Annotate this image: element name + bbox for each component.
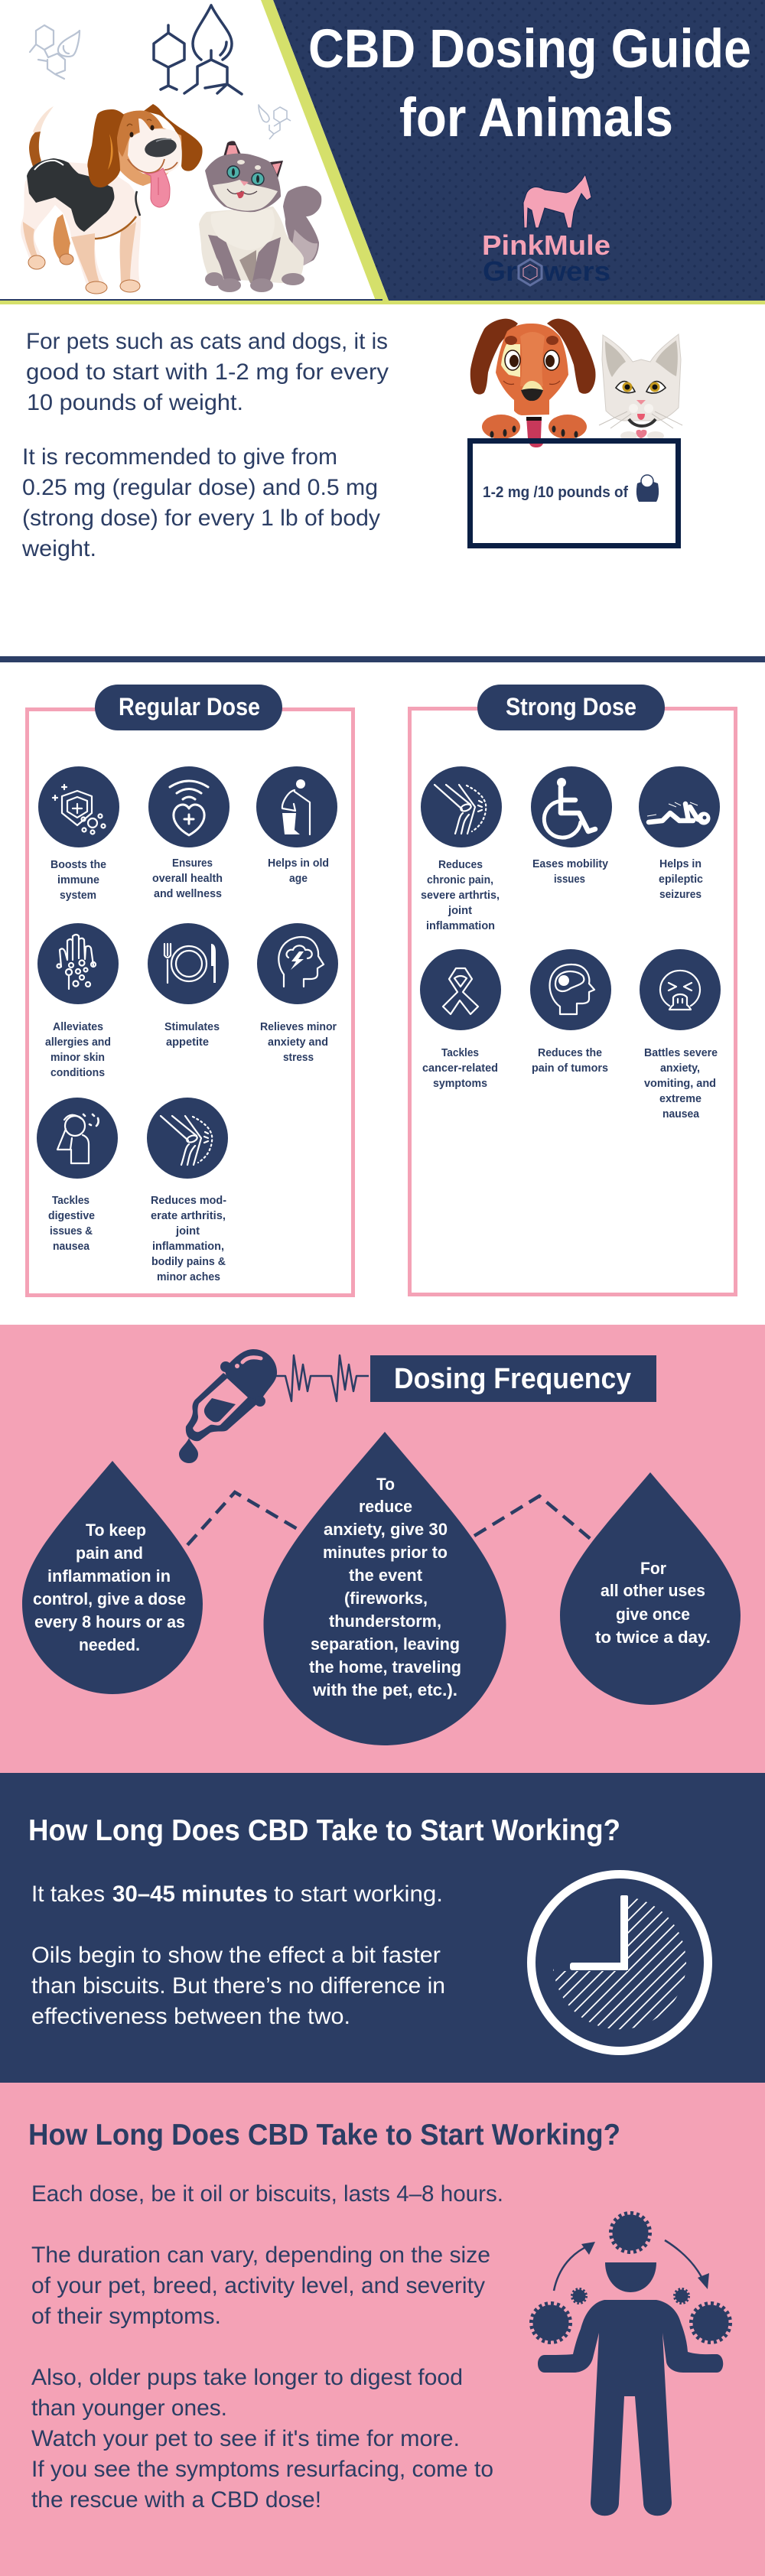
heading: dosing frequency: Dosing Frequency	[394, 1363, 631, 1395]
item: boosts immune system	[38, 766, 119, 902]
item: allergies	[37, 923, 119, 1079]
item: digestive issues: issues &	[50, 1225, 93, 1238]
drop: all other uses: For	[640, 1559, 666, 1578]
icon: clock	[527, 1870, 712, 2055]
item: anxiety: Relieves minor	[260, 1020, 337, 1033]
item: moderate arthritis	[147, 1098, 228, 1283]
heading: regular dose	[95, 685, 282, 730]
item: mobility: issues	[554, 873, 585, 886]
panel: strong dose	[410, 685, 736, 1294]
item: cancer symptoms: cancer-related	[422, 1062, 498, 1075]
icon: dropper with pulse	[179, 1349, 369, 1463]
item: epileptic seizures: epileptic	[659, 873, 703, 886]
title: for Animals	[399, 88, 673, 148]
item: anxiety	[257, 923, 338, 1064]
heading: dosing frequency	[370, 1355, 656, 1402]
item: severe nausea: extreme	[659, 1092, 702, 1105]
item: boosts immune system: immune	[57, 873, 99, 886]
logo: Pink Mule Growers: wers	[542, 255, 610, 287]
drop: anxiety: thunderstorm,	[329, 1612, 441, 1631]
text: duration factors: of their symptoms.	[31, 2304, 221, 2329]
drop: anxiety: minutes prior to	[323, 1543, 448, 1562]
item: appetite: appetite	[166, 1036, 209, 1049]
heading: strong dose: Strong Dose	[506, 693, 636, 720]
drop: anxiety: (fireworks,	[344, 1589, 428, 1608]
text: duration factors	[31, 2243, 490, 2329]
drop: anxiety: To	[376, 1475, 395, 1494]
illustration: fluffy cat	[199, 141, 321, 292]
item: allergies: allergies and	[45, 1036, 111, 1049]
item: epileptic seizures: seizures	[659, 888, 702, 901]
text: oils versus biscuits: effectiveness between the two.	[31, 2004, 350, 2029]
drop: all other uses: to twice a day.	[595, 1628, 711, 1647]
panel: duration of effect	[0, 2083, 765, 2576]
drop: all other uses: all other uses	[601, 1581, 705, 1600]
drop: pain and inflammation: pain and	[76, 1543, 143, 1563]
drop: pain and inflammation: every 8 hours or as	[34, 1612, 185, 1631]
item: boosts immune system: system	[60, 889, 96, 902]
item: chronic pain	[421, 766, 502, 932]
drop: pain and inflammation: needed.	[79, 1635, 140, 1654]
text: duration factors: of your pet, breed, activity level, and severity	[31, 2273, 485, 2298]
logo: Pink Mule Growers: Gr	[483, 255, 517, 287]
drop: pain and inflammation	[22, 1461, 203, 1694]
item: allergies: minor skin	[50, 1051, 105, 1064]
icon: molecule with drop	[154, 5, 242, 94]
item: digestive issues: Tackles	[52, 1194, 90, 1207]
illustration: beagle dog	[21, 104, 203, 294]
intro text: regular and strong dose	[21, 444, 380, 561]
item: severe nausea: anxiety,	[660, 1062, 700, 1075]
item: mobility: Eases mobility	[532, 857, 609, 870]
item: tumor pain	[530, 949, 611, 1075]
item: severe nausea: Battles severe	[644, 1046, 718, 1059]
item: chronic pain: Reduces	[438, 858, 483, 871]
item: cancer symptoms: Tackles	[441, 1046, 479, 1059]
item: old age: age	[289, 872, 308, 885]
drop: anxiety: with the pet, etc.).	[312, 1680, 457, 1699]
item: tumor pain: pain of tumors	[532, 1062, 608, 1075]
panel: dosing frequency	[0, 1325, 765, 1773]
item: overall health	[148, 766, 230, 900]
text: duration factors: The duration can vary, depending on the size	[31, 2243, 490, 2268]
text: duration: Each dose, be it oil or biscuits, lasts 4–8 hours.	[31, 2181, 503, 2207]
text: older pups: the rescue with a CBD dose!	[31, 2487, 321, 2513]
gears	[531, 2213, 730, 2342]
item: overall health: and wellness	[154, 887, 222, 900]
sign	[470, 441, 678, 546]
item: anxiety: stress	[283, 1051, 314, 1064]
text: older pups: Also, older pups take longer to digest food	[31, 2365, 463, 2390]
text: oils versus biscuits: Oils begin to show the effect a bit faster	[31, 1943, 441, 1968]
item: severe nausea	[640, 949, 721, 1120]
drop: all other uses: give once	[616, 1605, 690, 1624]
item: cancer symptoms: symptoms	[433, 1077, 487, 1090]
drop: anxiety: reduce	[359, 1497, 412, 1516]
item: old age: Helps in old	[268, 857, 329, 870]
text: older pups: than younger ones.	[31, 2395, 227, 2421]
heading: How Long Does CBD Take to Start Working?	[28, 2119, 620, 2152]
item: old age	[256, 766, 337, 885]
item: severe nausea: vomiting, and	[644, 1077, 716, 1090]
intro text: regular and strong dose: weight.	[21, 536, 96, 561]
intro text: regular and strong dose: (strong dose) for every 1 lb of body	[22, 506, 380, 531]
heading: regular dose: Regular Dose	[119, 693, 260, 720]
icon: faint molecule left	[30, 25, 80, 79]
item: overall health: overall health	[152, 872, 223, 885]
item: severe nausea: nausea	[662, 1107, 700, 1120]
drop: pain and inflammation: control, give a dose	[33, 1589, 186, 1608]
drop: all other uses	[560, 1472, 741, 1705]
text: onset time	[31, 1882, 443, 1907]
item: chronic pain: inflammation	[426, 919, 495, 932]
intro text: regular and strong dose: 0.25 mg (regular dose) and 0.5 mg	[22, 475, 378, 500]
panel: regular dose	[28, 685, 353, 1296]
text: oils versus biscuits: than biscuits. But there’s no difference in	[31, 1973, 445, 1999]
item: moderate arthritis: inflammation,	[152, 1240, 224, 1253]
drop: pain and inflammation: To keep	[86, 1521, 146, 1540]
text: older pups: Watch your pet to see if it's time for more.	[31, 2426, 460, 2451]
header banner	[0, 0, 765, 304]
drop: anxiety: the event	[349, 1566, 423, 1585]
panel: time to start working	[0, 1773, 765, 2083]
cartoon cat	[599, 334, 682, 441]
item: digestive issues: digestive	[48, 1209, 95, 1222]
logo: Pink Mule Growers	[482, 174, 610, 287]
item: mobility	[531, 766, 612, 886]
drop: anxiety: the home, traveling	[309, 1657, 461, 1677]
item: moderate arthritis: erate arthritis,	[151, 1209, 226, 1222]
icon: faint molecule right	[259, 105, 291, 139]
intro text: 1-2 mg guidance: good to start with 1-2 mg for every	[26, 359, 389, 385]
drop: anxiety	[263, 1432, 506, 1745]
text: onset time: It takes	[31, 1882, 105, 1907]
item: moderate arthritis: joint	[175, 1225, 200, 1238]
title	[308, 19, 751, 148]
item: digestive issues	[37, 1098, 118, 1253]
item: chronic pain: joint	[448, 904, 472, 917]
item: moderate arthritis: bodily pains &	[151, 1255, 226, 1268]
cartoon dog	[470, 319, 596, 447]
intro text: 1-2 mg guidance: For pets such as cats and dogs, it is	[26, 329, 388, 354]
heading: strong dose	[477, 685, 665, 730]
intro text: 1-2 mg guidance	[26, 329, 389, 415]
text: older pups: If you see the symptoms resurfacing, come to	[31, 2457, 493, 2482]
item: chronic pain: severe arthrtis,	[421, 889, 500, 902]
dashed connector left	[187, 1492, 300, 1545]
item: appetite	[148, 923, 229, 1049]
drop: pain and inflammation: inflammation in	[47, 1566, 171, 1586]
text: oils versus biscuits	[31, 1943, 445, 2029]
item: moderate arthritis: Reduces mod-	[151, 1194, 226, 1207]
text: older pups	[31, 2365, 493, 2513]
illustration: dog and cat holding sign	[470, 319, 682, 546]
intro text: 1-2 mg guidance: 10 pounds of weight.	[27, 390, 243, 415]
item: epileptic seizures: Helps in	[659, 857, 702, 870]
dashed connector right	[474, 1496, 591, 1540]
item: chronic pain: chronic pain,	[427, 873, 493, 886]
item: anxiety: anxiety and	[268, 1036, 328, 1049]
item: allergies: Alleviates	[53, 1020, 103, 1033]
item: overall health: Ensures	[172, 857, 213, 870]
item: digestive issues: nausea	[53, 1240, 90, 1253]
arrows	[554, 2240, 705, 2291]
intro text: regular and strong dose: It is recommended to give from	[22, 444, 337, 470]
item: boosts immune system: Boosts the	[50, 858, 106, 871]
text: onset time: 30–45 minutes	[112, 1882, 268, 1907]
drop: anxiety: separation, leaving	[311, 1634, 460, 1654]
item: tumor pain: Reduces the	[538, 1046, 602, 1059]
item: cancer symptoms	[420, 949, 501, 1090]
item: epileptic seizures	[639, 766, 720, 901]
drop: anxiety: anxiety, give 30	[324, 1520, 448, 1539]
item: appetite: Stimulates	[164, 1020, 220, 1033]
item: allergies: conditions	[50, 1066, 105, 1079]
icon: weighing scale	[636, 475, 659, 502]
icon: person juggling gears	[531, 2213, 730, 2516]
sign: 1-2 mg /10 pounds of	[483, 484, 628, 501]
heading: How Long Does CBD Take to Start Working?	[28, 1814, 620, 1847]
text: onset time: to start working.	[274, 1882, 443, 1907]
icon: mule	[523, 174, 591, 228]
logo: Pink Mule Growers: PinkMule	[482, 229, 610, 261]
item: moderate arthritis: minor aches	[157, 1270, 220, 1283]
